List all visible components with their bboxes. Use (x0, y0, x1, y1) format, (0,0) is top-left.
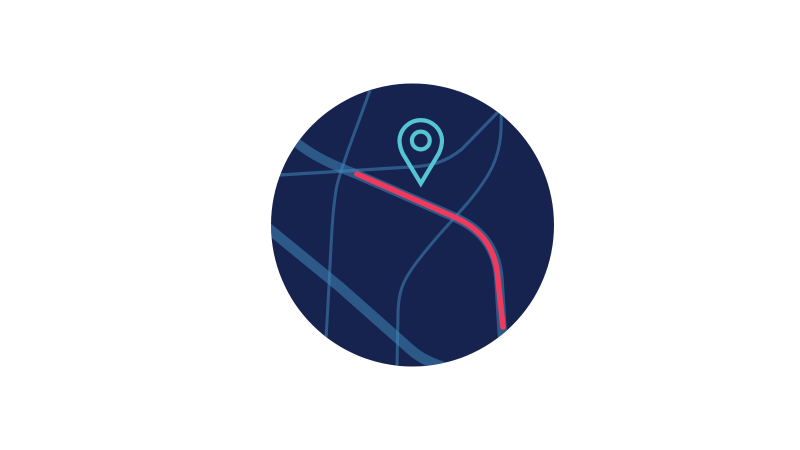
icon: location pin (400, 120, 442, 184)
map roads (268, 90, 503, 369)
thin road: right curve (397, 112, 501, 368)
thin road: horizontal to upper right (280, 112, 498, 175)
wide road: upper route casing (297, 143, 503, 345)
wide road: lower diagonal (268, 228, 450, 369)
highlighted route (357, 174, 503, 327)
circular map background (271, 84, 554, 366)
map infographic (271, 84, 554, 366)
thin road: upper left vertical (324, 90, 372, 338)
